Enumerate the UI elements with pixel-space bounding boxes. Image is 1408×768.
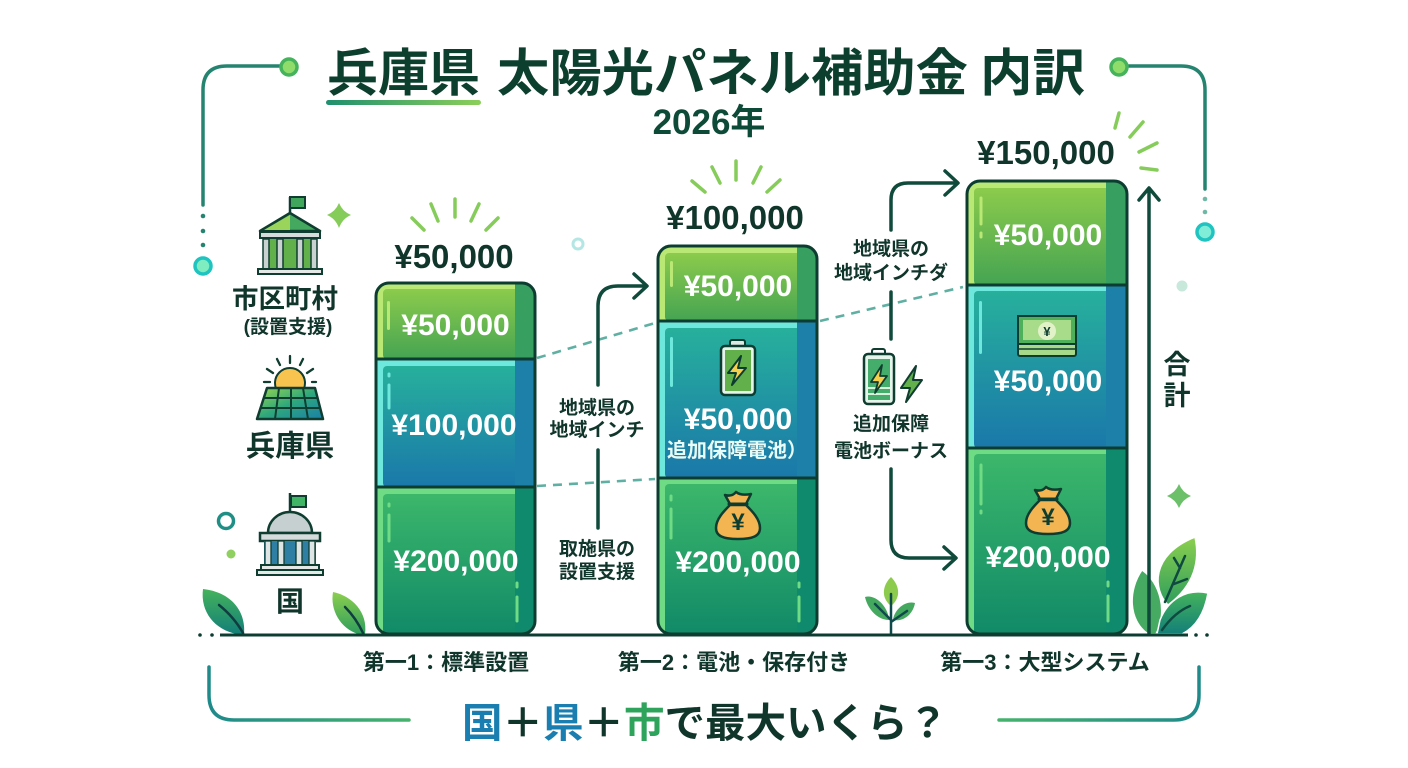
icon: banknotes: ¥	[1043, 324, 1051, 339]
label: installation support: 取施県の	[559, 538, 635, 560]
dashed guide lines	[537, 287, 963, 486]
bar 3: large system: ¥50,000	[994, 365, 1102, 398]
label: regional incentive	[549, 397, 645, 441]
frame: bottom left bracket	[209, 667, 409, 720]
arrow: total height	[1139, 188, 1159, 634]
title: 太陽光パネル補助金	[497, 45, 968, 102]
icon: money bag: ¥	[1041, 504, 1055, 531]
icon: money bag	[716, 492, 760, 539]
title: 兵庫県	[327, 45, 480, 102]
bar 3: large system: ¥200,000	[985, 541, 1111, 574]
label: installation support: 設置支援	[559, 561, 635, 583]
total: bar 3: ¥150,000	[977, 134, 1115, 171]
label: municipality: (設置支援)	[244, 316, 332, 338]
label: regional incentive: 地域インチ	[549, 419, 645, 441]
ground line	[198, 633, 1209, 637]
label: additional battery bonus: 追加保障	[853, 413, 929, 435]
teal flow line to bar 3	[829, 556, 950, 560]
icon: banknotes	[1018, 316, 1076, 356]
bar 3: large system	[967, 181, 1127, 634]
caption: bar 1: 第一1：標準設置	[363, 650, 529, 675]
decorations	[218, 203, 1188, 558]
label: additional battery bonus: 電池ボーナス	[834, 440, 948, 462]
label: regional incentive 2: 地域インチダ	[834, 261, 948, 284]
bar 1: standard installation: ¥50,000	[401, 309, 510, 342]
label: total: 計	[1164, 381, 1190, 411]
bar 1: standard installation: ¥100,000	[391, 409, 517, 442]
total: bar 1	[394, 199, 514, 275]
arrow segment: connector	[889, 292, 893, 339]
icon: national capitol	[257, 493, 323, 575]
label: regional incentive 2	[834, 238, 948, 284]
icon: municipal hall	[258, 197, 322, 274]
icon: sprout	[865, 577, 915, 634]
label: regional incentive 2: 地域県の	[853, 238, 929, 260]
label: municipality	[232, 284, 338, 338]
arrow: to bar 3 bottom	[891, 469, 956, 569]
label: Hyogo prefecture: 兵庫県	[246, 430, 334, 463]
total: bar 1: ¥50,000	[394, 238, 514, 275]
icon: battery with bolt	[864, 349, 922, 404]
bar 2: with battery storage: 追加保障電池）	[667, 439, 807, 462]
icon: money bag	[1026, 487, 1070, 534]
frame: bottom right bracket	[999, 667, 1199, 720]
bar 1: standard installation	[376, 283, 535, 634]
label: additional battery bonus	[834, 413, 948, 462]
title: 内訳	[980, 45, 1085, 102]
icon: large leaves	[1132, 484, 1208, 634]
icon: battery	[721, 340, 755, 395]
caption: bar 3: 第一3：大型システム	[940, 650, 1150, 675]
label: municipality: 市区町村	[232, 284, 338, 314]
label: installation support	[559, 538, 635, 583]
bar 2: with battery storage	[658, 246, 817, 634]
arrow: to bar 2 top	[598, 274, 647, 385]
label: total: 合	[1164, 350, 1190, 380]
total: bar 2: ¥100,000	[666, 199, 804, 236]
bar 2: with battery storage: ¥200,000	[675, 546, 801, 579]
title underline	[326, 100, 481, 105]
label: nation: 国	[276, 586, 304, 617]
icon: left leaf	[203, 589, 244, 634]
arrow segment: lower connector	[596, 450, 600, 528]
bar 1: standard installation: ¥200,000	[393, 545, 519, 578]
bar 2: with battery storage: ¥50,000	[684, 270, 792, 303]
frame: top right connector	[1111, 59, 1213, 240]
subtitle: year: 2026年	[653, 103, 765, 142]
label: total	[1164, 350, 1190, 411]
label: regional incentive: 地域県の	[559, 397, 635, 419]
frame: top left connector	[195, 59, 297, 274]
bar 3: large system: ¥50,000	[994, 219, 1102, 252]
total: bar 3	[977, 113, 1157, 171]
icon: sun and solar panel	[257, 356, 323, 419]
title	[327, 45, 1085, 102]
caption: bar 2: 第一2：電池・保存付き	[618, 650, 850, 675]
icon: money bag: ¥	[731, 509, 745, 536]
arrow: to bar 3 top	[891, 171, 958, 230]
icon: second leaf	[332, 592, 365, 634]
bar 2: with battery storage: ¥50,000	[684, 403, 792, 436]
bottom question: 国＋県＋市で最大いくら？	[462, 700, 948, 746]
total: bar 2	[666, 161, 804, 236]
